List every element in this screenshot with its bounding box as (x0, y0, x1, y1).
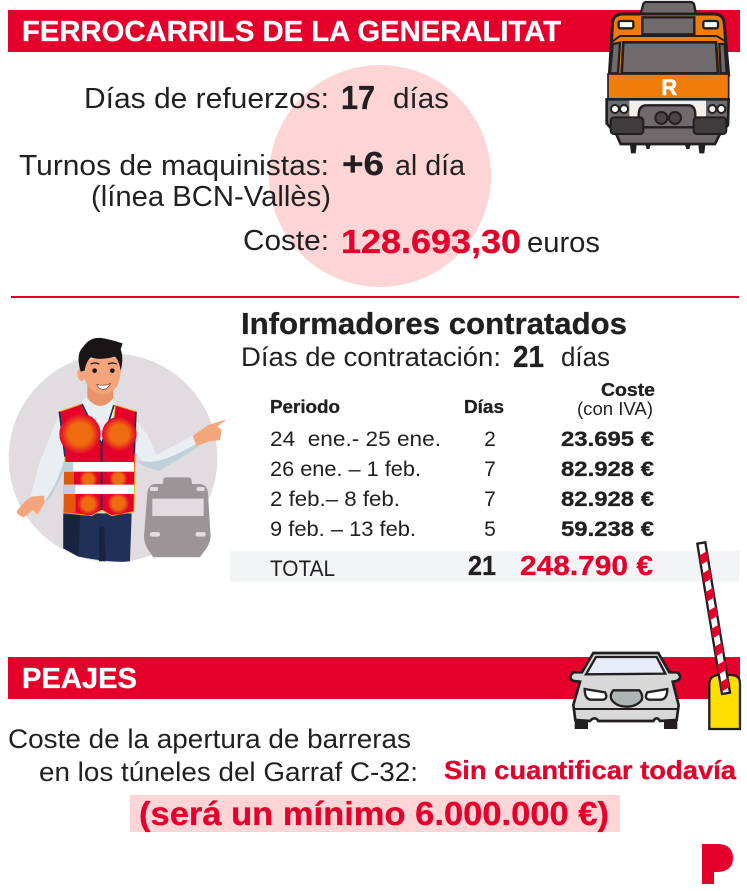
left arm (31, 413, 66, 503)
text block: peajes description (8, 724, 418, 787)
table: periods: 248.790 € (520, 550, 653, 581)
icon: P logo (702, 844, 733, 884)
text: dias de contratacion (241, 339, 610, 374)
icon: barrier arm (697, 542, 730, 694)
text block: ferrocarrils data: al día (395, 150, 466, 182)
text block: ferrocarrils data: días (393, 83, 449, 115)
table: periods: (con IVA) (577, 399, 653, 419)
heading: informadores contratados: Informadores contratados (241, 306, 627, 341)
right arm (133, 418, 199, 468)
text block: peajes description: en los túneles del Garraf C-32: (39, 757, 418, 787)
icon: orange train: R (661, 75, 677, 100)
trousers (63, 513, 132, 562)
text: dias de contratacion: días (561, 342, 610, 372)
head (87, 385, 113, 406)
text block: ferrocarrils data: (línea BCN-Vallès) (91, 181, 331, 213)
table: periods: 24 ene.- 25 ene. (270, 428, 441, 451)
text block: ferrocarrils data (19, 79, 600, 260)
text block: ferrocarrils data: +6 (342, 145, 384, 182)
table: periods: 7 (484, 458, 496, 481)
table: periods: 23.695 € (561, 428, 654, 451)
table: periods: 59.238 € (561, 518, 654, 541)
table: periods: 9 feb. – 13 feb. (270, 518, 416, 541)
table: periods: 82.928 € (561, 458, 654, 481)
table: periods: Periodo (270, 397, 340, 417)
icon: car and barrier (570, 542, 740, 729)
panel: ferrocarrils header bar (8, 10, 740, 52)
panel: ferrocarrils header bar: FERROCARRILS DE LA GENERALITAT (22, 16, 561, 48)
table: periods: 26 ene. – 1 feb. (270, 458, 421, 481)
text block: ferrocarrils data: Coste: (243, 225, 329, 257)
panel: peajes header bar: PEAJES (22, 663, 137, 695)
icon: barrier post (709, 675, 740, 729)
text block: ferrocarrils data: Días de refuerzos: (84, 83, 329, 115)
icon: car (570, 653, 680, 729)
table: periods: TOTAL (270, 556, 335, 581)
callout: minimum cost: (será un mínimo 6.000.000 €) (139, 795, 609, 832)
table: periods: 2 (484, 428, 496, 451)
text block: peajes description: Coste de la apertura de barreras (8, 724, 411, 754)
text block: ferrocarrils data: 128.693,30 (341, 223, 521, 260)
illustration: informer man in vest (9, 338, 227, 562)
text block: ferrocarrils data: Turnos de maquinistas: (19, 150, 329, 182)
table: periods: 82.928 € (561, 488, 654, 511)
icon: orange train (607, 2, 729, 153)
table: periods: 5 (484, 518, 496, 541)
icon: grey train (144, 477, 211, 557)
table: periods: 2 feb.– 8 feb. (270, 488, 400, 511)
vest (59, 404, 136, 516)
table: periods: Días (464, 397, 504, 417)
table: periods (230, 380, 739, 582)
text block: ferrocarrils data: 17 (341, 79, 375, 116)
callout: sin cuantificar: Sin cuantificar todavía (444, 755, 737, 785)
table: periods: Coste (601, 380, 655, 400)
table: periods: 21 (468, 550, 496, 581)
text: dias de contratacion: 21 (513, 339, 544, 374)
text block: ferrocarrils data: euros (527, 227, 600, 259)
decorative pink circle (269, 65, 491, 287)
text: dias de contratacion: Días de contratación: (241, 342, 501, 372)
table: periods: 7 (484, 488, 496, 511)
shirt (82, 395, 115, 450)
panel: peajes header bar (8, 657, 740, 699)
